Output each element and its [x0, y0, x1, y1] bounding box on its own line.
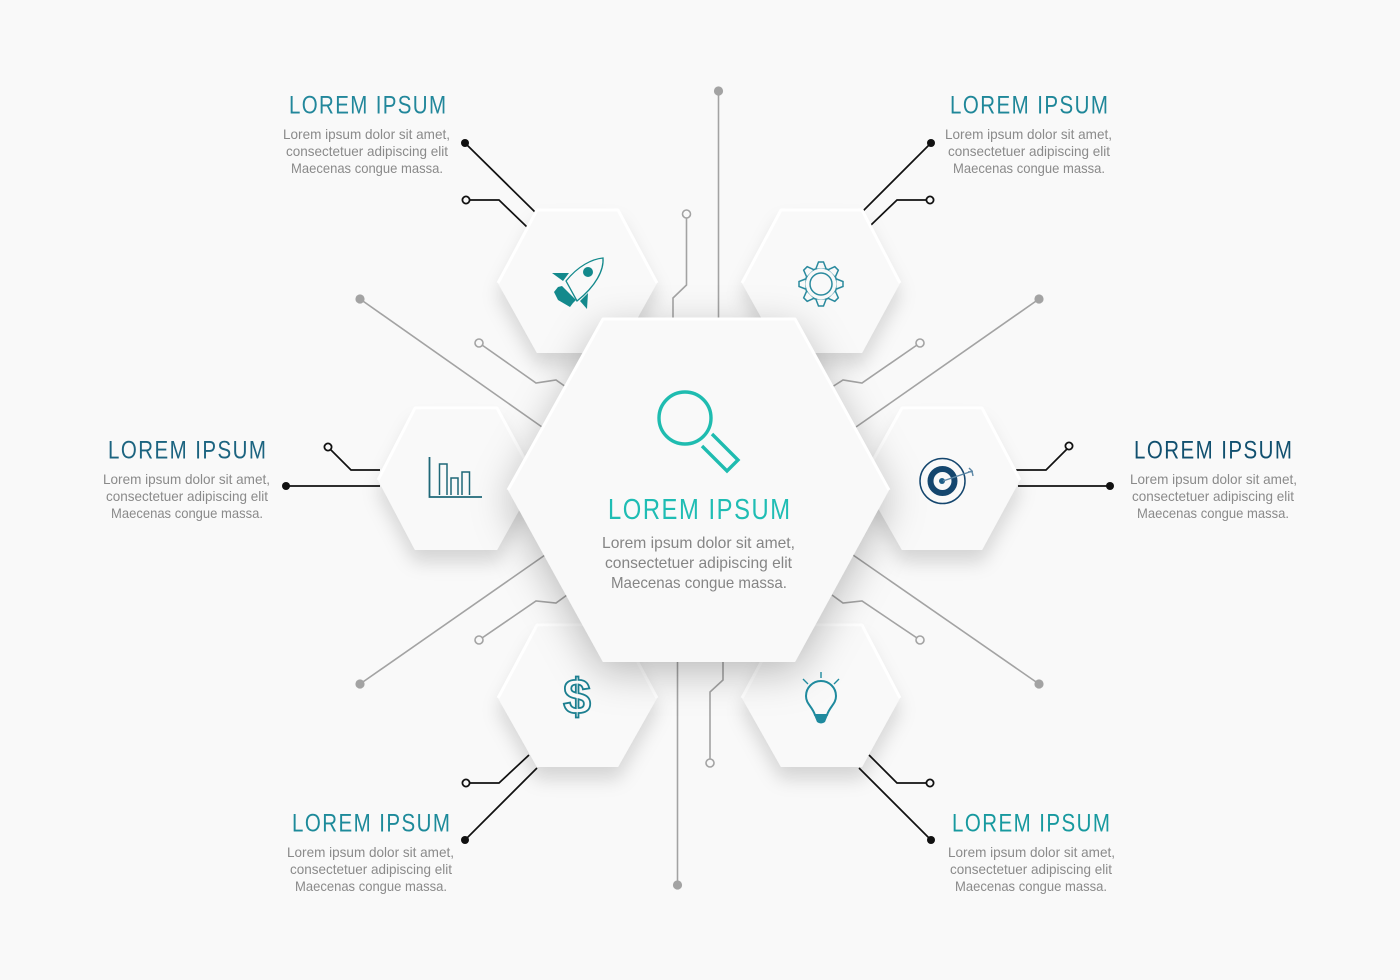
text block: top right: Lorem ipsum dolor sit amet, — [945, 126, 1112, 142]
text block: bottom right: Lorem ipsum dolor sit amet, — [948, 844, 1115, 860]
hexagon: gear — [742, 210, 900, 353]
text block: center: LOREM IPSUM — [608, 493, 790, 526]
text block: left: consectetuer adipiscing elit — [106, 488, 268, 504]
text block: left — [103, 436, 270, 521]
text block: top left: Maecenas congue massa. — [291, 160, 443, 176]
hexagon: bulb — [742, 625, 900, 767]
text block: top left: LOREM IPSUM — [289, 91, 446, 119]
black connectors: bottom right — [859, 755, 935, 844]
grey connector: lower right long — [853, 555, 1044, 689]
text block: right: Lorem ipsum dolor sit amet, — [1130, 471, 1297, 487]
black connectors: right — [1016, 442, 1114, 490]
text block: top right: consectetuer adipiscing elit — [948, 143, 1110, 159]
text block: bottom right: consectetuer adipiscing elit — [950, 861, 1112, 877]
grey connector: lower left short — [475, 595, 567, 644]
icon: light bulb — [803, 672, 839, 724]
grey connector: upper right long — [856, 294, 1044, 427]
icon: bar chart — [430, 457, 482, 497]
icon: dollar: $ — [563, 669, 591, 725]
text block: right: consectetuer adipiscing elit — [1132, 488, 1294, 504]
icon: rocket — [552, 258, 603, 309]
black connectors: top left — [461, 139, 535, 227]
text block: bottom right: LOREM IPSUM — [952, 809, 1110, 837]
grey connector: bottom short — [706, 660, 723, 767]
icon: target — [920, 458, 973, 504]
grey connector: top long — [714, 86, 723, 320]
text block: center: Lorem ipsum dolor sit amet, — [602, 535, 795, 552]
black connectors: top right — [863, 139, 935, 225]
text block: top right: Maecenas congue massa. — [953, 160, 1105, 176]
hexagon: chart — [378, 408, 536, 550]
grey connector: upper right short — [832, 339, 924, 387]
grey connector: upper left long — [355, 294, 542, 427]
text block: bottom left — [287, 809, 454, 894]
grey connector: lower right short — [832, 595, 924, 644]
text block: top right — [945, 91, 1112, 176]
text block: bottom right — [948, 809, 1115, 894]
text block: bottom right: Maecenas congue massa. — [955, 878, 1107, 894]
hexagon: rocket — [498, 210, 657, 353]
hexagon: target — [862, 408, 1020, 550]
text block: top left: consectetuer adipiscing elit — [286, 143, 448, 159]
text block: right: Maecenas congue massa. — [1137, 505, 1289, 521]
text block: bottom left: consectetuer adipiscing elit — [290, 861, 452, 877]
grey connector: top short — [673, 210, 690, 320]
grey connector: bottom long — [673, 660, 682, 890]
text block: left: Lorem ipsum dolor sit amet, — [103, 471, 270, 487]
text block: right — [1130, 436, 1297, 521]
text block: bottom left: Lorem ipsum dolor sit amet, — [287, 844, 454, 860]
black connectors: bottom left — [461, 755, 537, 844]
text block: left: LOREM IPSUM — [108, 436, 266, 464]
text block: left: Maecenas congue massa. — [111, 505, 263, 521]
text block: bottom left: Maecenas congue massa. — [295, 878, 447, 894]
text block: top right: LOREM IPSUM — [950, 91, 1108, 119]
text block: center — [602, 493, 795, 592]
text block: center: consectetuer adipiscing elit — [605, 555, 793, 572]
text block: center: Maecenas congue massa. — [611, 575, 787, 592]
text block: top left — [283, 91, 450, 176]
icon: magnifier — [659, 392, 738, 471]
grey connector: lower left long — [355, 555, 545, 689]
grey connector: upper left short — [475, 339, 566, 387]
icon: gear — [799, 262, 843, 306]
text block: top left: Lorem ipsum dolor sit amet, — [283, 126, 450, 142]
hexagon: dollar — [498, 625, 657, 767]
central hexagon — [508, 319, 889, 662]
text block: bottom left: LOREM IPSUM — [292, 809, 450, 837]
black connectors: left — [282, 443, 380, 490]
text block: right: LOREM IPSUM — [1134, 436, 1292, 464]
